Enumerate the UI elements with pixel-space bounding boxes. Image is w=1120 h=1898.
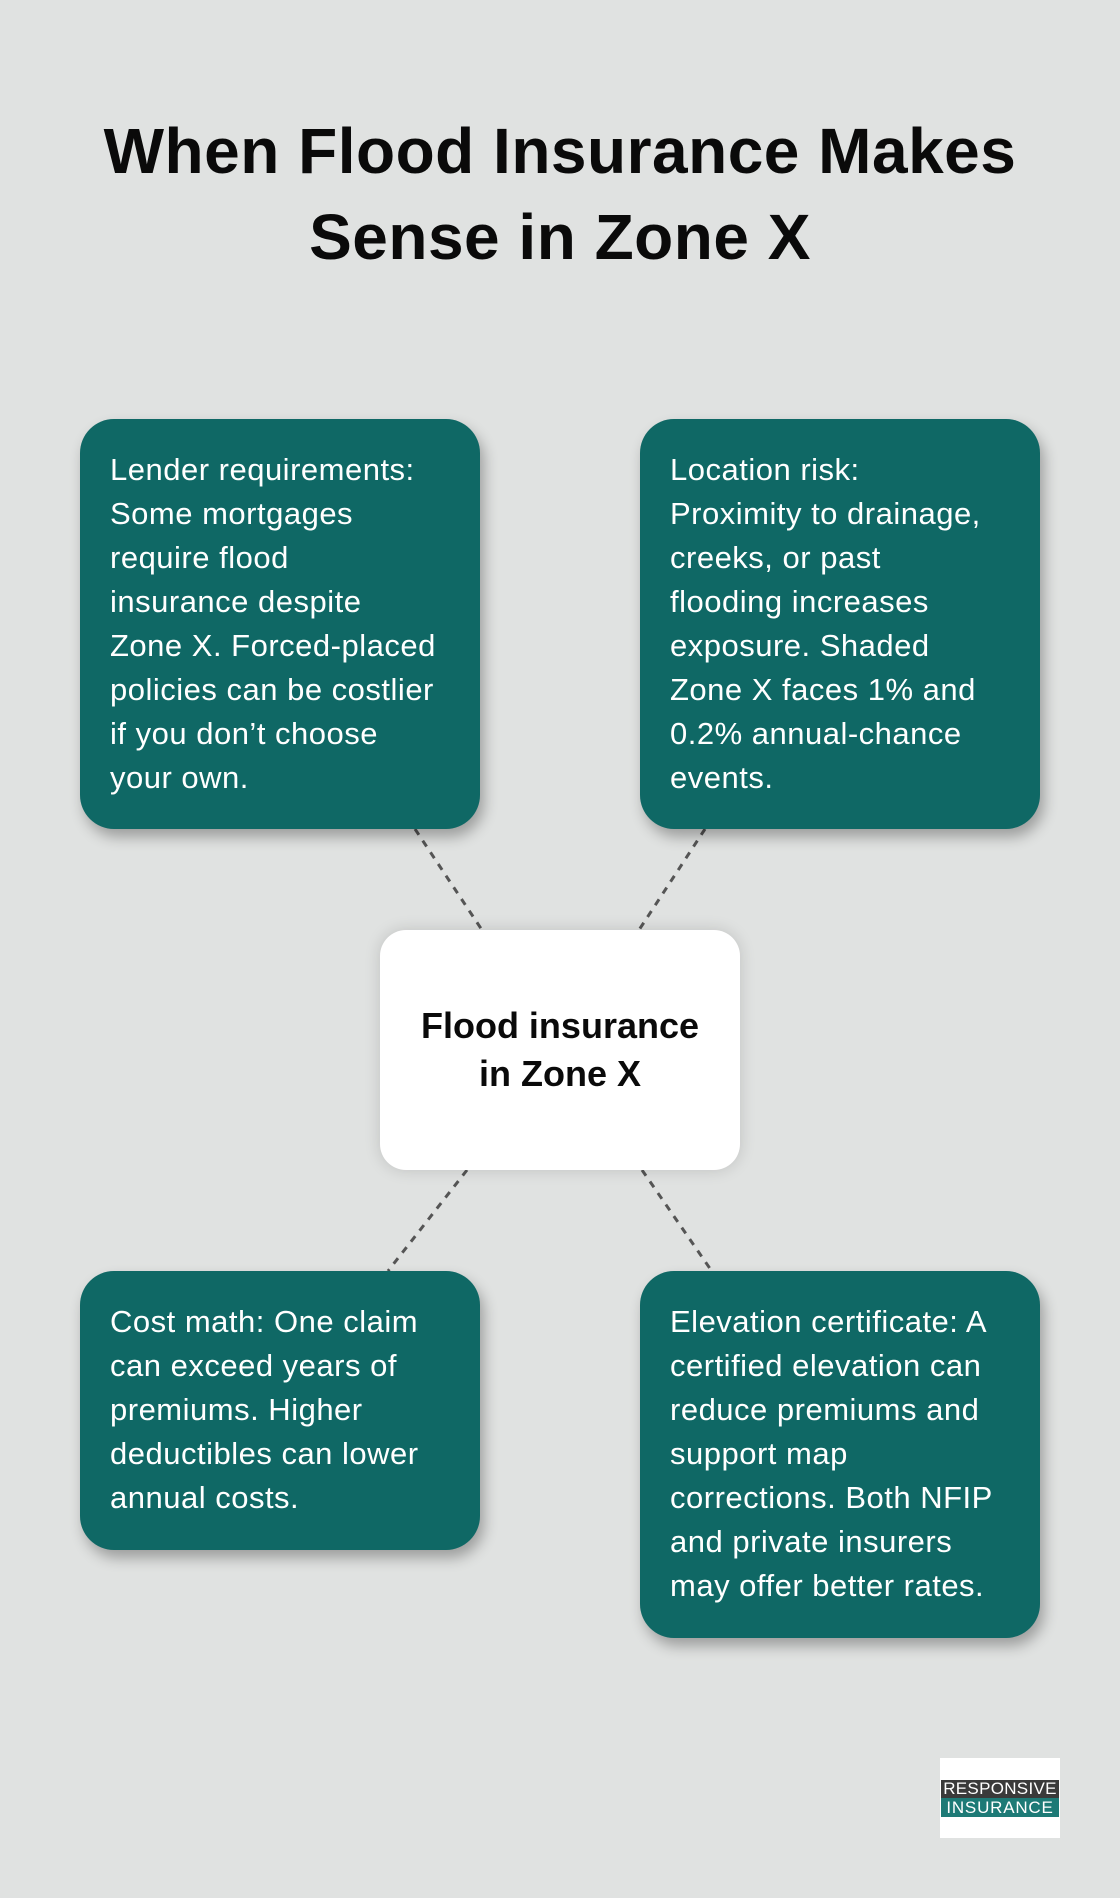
- panel: lender requirements: [80, 419, 480, 829]
- panel: location risk: [640, 419, 1040, 829]
- panel: cost math: premiums. Higher: [110, 1392, 363, 1427]
- panel: location risk: Proximity to drainage,: [670, 496, 981, 531]
- logo: RESPONSIVE: [943, 1779, 1057, 1798]
- panel: lender requirements: Lender requirements:: [110, 452, 415, 487]
- panel: location risk: flooding increases: [670, 584, 929, 619]
- panel: cost math: Cost math: One claim: [110, 1304, 418, 1339]
- panel: elevation certificate: and private insurers: [670, 1524, 952, 1559]
- panel: elevation certificate: Elevation certificate: A: [670, 1304, 987, 1339]
- panel: location risk: events.: [670, 760, 773, 795]
- panel: lender requirements: Zone X. Forced-placed: [110, 628, 436, 663]
- panel: location risk: Location risk:: [670, 452, 860, 487]
- logo: INSURANCE: [946, 1798, 1054, 1817]
- panel: location risk: 0.2% annual-chance: [670, 716, 962, 751]
- title: Sense in Zone X: [309, 201, 811, 273]
- center node: Flood insurance: [421, 1005, 699, 1046]
- center node: in Zone X: [479, 1053, 641, 1094]
- panel: elevation certificate: support map: [670, 1436, 848, 1471]
- center node: [380, 930, 740, 1170]
- panel: cost math: [80, 1271, 480, 1550]
- panel: lender requirements: your own.: [110, 760, 249, 795]
- panel: location risk: Zone X faces 1% and: [670, 672, 976, 707]
- panel: lender requirements: Some mortgages: [110, 496, 353, 531]
- panel: cost math: can exceed years of: [110, 1348, 397, 1383]
- logo: [940, 1758, 1060, 1838]
- title: [104, 115, 1016, 273]
- panel: elevation certificate: reduce premiums and: [670, 1392, 979, 1427]
- panel: cost math: deductibles can lower: [110, 1436, 419, 1471]
- panel: location risk: exposure. Shaded: [670, 628, 930, 663]
- panel: elevation certificate: corrections. Both NFIP: [670, 1480, 993, 1515]
- panel: lender requirements: if you don’t choose: [110, 716, 378, 751]
- panel: cost math: annual costs.: [110, 1480, 299, 1515]
- title: When Flood Insurance Makes: [104, 115, 1016, 187]
- panel: location risk: creeks, or past: [670, 540, 881, 575]
- panel: lender requirements: require flood: [110, 540, 289, 575]
- panel: elevation certificate: may offer better rates.: [670, 1568, 984, 1603]
- panel: lender requirements: insurance despite: [110, 584, 362, 619]
- panel: elevation certificate: certified elevation can: [670, 1348, 981, 1383]
- panel: lender requirements: policies can be costlier: [110, 672, 434, 707]
- panel: elevation certificate: [640, 1271, 1040, 1638]
